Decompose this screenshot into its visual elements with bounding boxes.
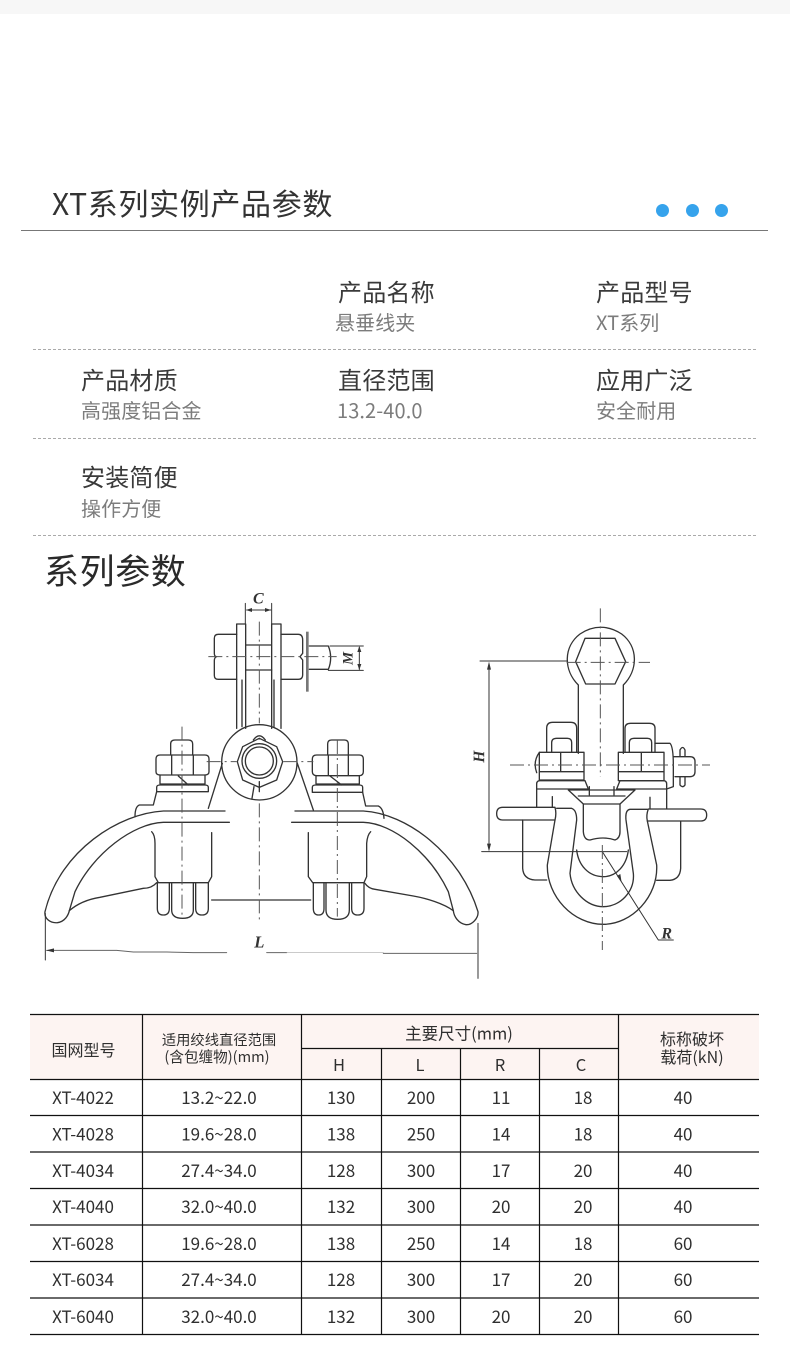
spec: material: 产品材质 <box>81 361 178 396</box>
bolts and nuts <box>535 722 695 808</box>
technical drawing: front view <box>45 590 478 978</box>
spec: product name: 悬垂线夹 <box>335 307 415 336</box>
row XT-4034: 300 <box>407 1157 435 1182</box>
row XT-6040: 32.0~40.0 <box>181 1303 257 1328</box>
decorative three blue dots <box>656 204 728 217</box>
spec: product name <box>335 273 435 336</box>
row XT-6040: XT-6040 <box>52 1303 114 1328</box>
row XT-4022: 18 <box>574 1084 592 1109</box>
row XT-4034: XT-4034 <box>52 1157 114 1182</box>
table header: C <box>576 1052 586 1076</box>
table header <box>51 1020 724 1076</box>
row XT-6040: 60 <box>674 1303 692 1328</box>
dimension H: H <box>471 750 488 764</box>
row XT-4034: 17 <box>492 1157 510 1182</box>
table header: 国网型号 <box>51 1037 116 1061</box>
row XT-6028: 19.6~28.0 <box>181 1230 257 1255</box>
spec: easy install <box>81 458 178 522</box>
row XT-6034: 20 <box>574 1266 592 1291</box>
row XT-6028: 250 <box>407 1230 435 1255</box>
dimension R leader <box>602 852 673 942</box>
spec: diameter range: 13.2-40.0 <box>337 395 423 424</box>
row XT-4022 <box>52 1084 692 1109</box>
row XT-4028: 250 <box>407 1120 435 1146</box>
row XT-6034: 27.4~34.0 <box>181 1266 257 1291</box>
row XT-6040: 20 <box>574 1303 592 1328</box>
centre socket <box>568 787 635 840</box>
right bolt assembly <box>312 740 384 818</box>
dimension L: L <box>253 933 264 952</box>
heading: series parameters: 系列参数 <box>44 544 186 595</box>
row XT-4022: 40 <box>674 1084 692 1109</box>
dimension C <box>245 590 272 624</box>
top grey band <box>0 0 790 14</box>
row XT-6040: 132 <box>327 1303 355 1328</box>
dimension L <box>45 913 478 978</box>
row XT-6034: 128 <box>327 1266 355 1291</box>
spec: easy install: 安装简便 <box>81 458 178 493</box>
table header: H <box>333 1052 345 1076</box>
dimension R leader: R <box>660 925 672 942</box>
centre lines <box>182 622 337 920</box>
spec: material <box>81 361 202 424</box>
technical drawing: side view <box>471 608 710 950</box>
centre pivot ring <box>208 725 313 810</box>
table header background <box>30 1014 759 1079</box>
row XT-4022: 200 <box>407 1084 435 1109</box>
ring and shank <box>567 627 634 753</box>
clamp body <box>45 811 478 925</box>
title: XT系列实例产品参数 <box>52 180 333 224</box>
row XT-6040: 300 <box>407 1303 435 1328</box>
row XT-4028: 14 <box>492 1120 510 1146</box>
table header: 适用绞线直径范围 <box>162 1029 276 1050</box>
row XT-4022: 130 <box>327 1084 355 1109</box>
spec: diameter range <box>337 361 435 424</box>
row XT-4028: XT-4028 <box>52 1120 114 1146</box>
row XT-6034: XT-6034 <box>52 1266 114 1291</box>
row XT-6028: 60 <box>674 1230 692 1255</box>
row XT-6040: 20 <box>492 1303 510 1328</box>
row XT-4040: 32.0~40.0 <box>181 1193 257 1218</box>
table header: 标称破坏 <box>660 1026 724 1050</box>
left U-bolt legs <box>152 832 212 918</box>
row XT-4034 <box>52 1157 692 1182</box>
row XT-6040 <box>52 1303 692 1328</box>
row XT-6034: 17 <box>492 1266 510 1291</box>
row XT-4040: 20 <box>492 1193 510 1218</box>
centre lines <box>510 608 710 950</box>
parameter table <box>30 1014 759 1334</box>
row XT-4040: 40 <box>674 1193 692 1218</box>
dimension C: C <box>253 590 264 607</box>
table header: R <box>495 1052 505 1076</box>
row XT-4028: 138 <box>327 1120 355 1146</box>
row XT-4034: 20 <box>574 1157 592 1182</box>
row XT-4028: 40 <box>674 1120 692 1146</box>
spec: application <box>596 361 693 424</box>
row XT-6028: 18 <box>574 1230 592 1255</box>
row XT-4040: 132 <box>327 1193 355 1218</box>
row XT-4034: 40 <box>674 1157 692 1182</box>
table header: 主要尺寸(mm) <box>405 1020 513 1044</box>
spec: diameter range: 直径范围 <box>338 361 435 396</box>
table header: 载荷(kN) <box>660 1044 724 1068</box>
row XT-6028: 138 <box>327 1230 355 1255</box>
table header: (含包缠物)(mm) <box>164 1046 270 1067</box>
table header: L <box>416 1052 425 1076</box>
yoke plates and bolt <box>208 624 363 728</box>
row XT-6034: 300 <box>407 1266 435 1291</box>
row XT-4022: 11 <box>492 1084 510 1109</box>
row XT-4028: 19.6~28.0 <box>181 1120 257 1146</box>
flanges <box>497 797 707 880</box>
row XT-4034: 128 <box>327 1157 355 1182</box>
left bolt assembly <box>135 740 209 817</box>
spec: application: 安全耐用 <box>596 395 676 424</box>
spec: product model <box>596 273 693 336</box>
spec: product model: 产品型号 <box>596 273 693 308</box>
row XT-4022: 13.2~22.0 <box>181 1084 257 1109</box>
row XT-6034: 60 <box>674 1266 692 1291</box>
row XT-4040: XT-4040 <box>52 1193 114 1218</box>
row XT-6028 <box>52 1230 692 1255</box>
yoke plates and bolt: M <box>340 651 356 666</box>
spec: application: 应用广泛 <box>596 361 693 396</box>
row XT-6034 <box>52 1266 692 1291</box>
spec: material: 高强度铝合金 <box>81 395 202 424</box>
row XT-4022: XT-4022 <box>52 1084 114 1109</box>
shackle U <box>547 808 657 924</box>
row XT-4028: 18 <box>574 1120 592 1146</box>
row XT-6028: XT-6028 <box>52 1230 114 1255</box>
spec: product model: XT系列 <box>596 307 659 336</box>
spec: product name: 产品名称 <box>338 273 435 308</box>
row XT-4040 <box>52 1193 692 1218</box>
spec: easy install: 操作方便 <box>81 493 161 522</box>
title rule <box>21 230 768 231</box>
row XT-4040: 20 <box>574 1193 592 1218</box>
right U-bolt legs <box>308 832 371 919</box>
row XT-6028: 14 <box>492 1230 510 1255</box>
row XT-4040: 300 <box>407 1193 435 1218</box>
row XT-4034: 27.4~34.0 <box>181 1157 257 1182</box>
dimension H <box>471 661 627 852</box>
row XT-4028 <box>52 1120 692 1146</box>
